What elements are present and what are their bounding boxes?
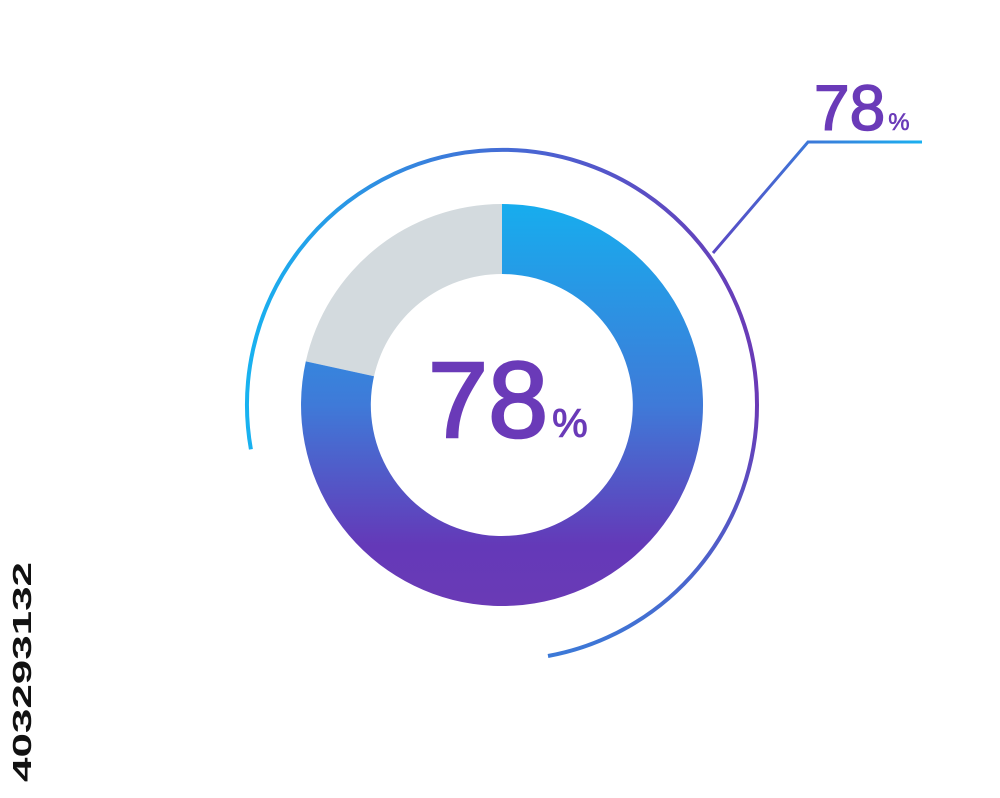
donut: gray remainder	[306, 204, 502, 376]
donut: 78% segment	[301, 204, 703, 606]
callout label: 78%	[814, 72, 910, 144]
outer arc	[247, 150, 757, 656]
center label: 78%	[428, 339, 588, 460]
leader line	[713, 142, 922, 253]
watermark id: 403293132	[7, 562, 37, 782]
